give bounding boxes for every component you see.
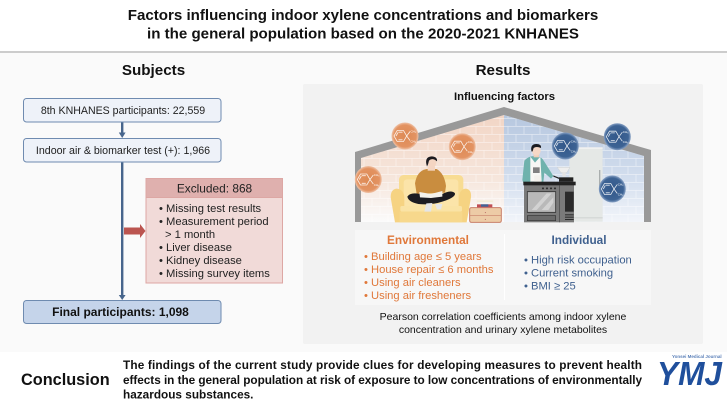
xylene molecules: environmental	[355, 122, 476, 193]
individual factors: • High risk occupation	[524, 254, 632, 266]
xylene molecules: environmental: CH₃	[374, 173, 380, 177]
heading: influencing factors: Influencing factors	[454, 91, 555, 103]
arrow: exclusion	[124, 224, 146, 238]
box: final participants	[24, 300, 221, 324]
logo: YMJ: Yonsei Medical Journal	[672, 354, 722, 359]
xylene molecules: environmental: CH₃	[468, 150, 474, 154]
heading: conclusion: Conclusion	[21, 371, 110, 389]
sofa	[391, 175, 471, 222]
box: KNHANES participants	[24, 98, 221, 122]
conclusion text: hazardous substances.	[123, 388, 253, 402]
arrow: participants to test	[119, 122, 126, 138]
individual factors: • BMI ≥ 25	[524, 280, 576, 292]
environmental factors: • Using air fresheners	[364, 290, 472, 302]
xylene molecules: individual: CH₃	[618, 182, 624, 186]
title	[128, 7, 598, 42]
exclusion list: • Liver disease	[159, 242, 232, 254]
xylene molecules: environmental: CH₃	[410, 140, 417, 144]
xylene molecules: individual	[552, 123, 631, 202]
correlation note: Pearson correlation coefficients among indoor xylene	[380, 311, 627, 323]
scene: living room	[391, 156, 501, 222]
xylene molecules: individual: CH₃	[623, 140, 629, 144]
title: Factors influencing indoor xylene concentrations and biomarkers	[128, 7, 598, 24]
xylene molecules: individual: CH₃	[618, 192, 624, 196]
illustration: house	[355, 107, 651, 222]
arrow: test to final participants	[119, 162, 126, 300]
xylene molecules: environmental: CH₃	[468, 140, 474, 144]
side table with books	[470, 200, 501, 222]
individual factors: Individual	[551, 233, 607, 247]
exclusion list	[159, 203, 270, 280]
correlation note: concentration and urinary xylene metabolites	[399, 324, 607, 336]
xylene molecules: individual: CH₃	[571, 150, 577, 154]
exclusion list: > 1 month	[165, 229, 215, 241]
stove	[523, 182, 576, 222]
xylene molecules: individual: CH₃	[623, 130, 629, 134]
box: final participants: Final participants: 1,098	[52, 305, 189, 319]
logo: YMJ: YMJ	[657, 355, 723, 392]
environmental factors: • Using air cleaners	[364, 277, 461, 289]
excluded header: Excluded: 868	[177, 182, 253, 196]
panel: results	[303, 84, 703, 344]
panel: subjects flowchart	[24, 62, 282, 324]
box: indoor air and biomarker test: Indoor air & biomarker test (+): 1,966	[36, 145, 210, 157]
environmental factors: Environmental	[387, 233, 469, 247]
panel: factors	[355, 230, 651, 305]
exclusion list: • Kidney disease	[159, 255, 242, 267]
refrigerator	[569, 147, 603, 222]
title: in the general population based on the 2020-2021 KNHANES	[147, 26, 579, 42]
conclusion text: effects in the general population at risk of exposure to low concentrations of environmentally	[123, 373, 642, 387]
conclusion text: The findings of the current study provide clues for developing measures to prevent health	[123, 358, 642, 372]
walls	[361, 115, 504, 222]
roof	[355, 107, 651, 222]
box: KNHANES participants: 8th KNHANES participants: 22,559	[41, 105, 205, 117]
xylene molecules: environmental: CH₃	[410, 130, 417, 134]
conclusion text	[123, 358, 642, 402]
environmental factors: • Building age ≤ 5 years	[364, 251, 482, 263]
environmental factors: • House repair ≤ 6 months	[364, 264, 494, 276]
individual factors	[524, 233, 632, 292]
individual factors: • Current smoking	[524, 268, 613, 280]
pan and bowl	[553, 167, 573, 182]
panel: excluded	[146, 178, 282, 283]
background band	[0, 53, 727, 352]
exclusion list: • Missing test results	[159, 203, 262, 215]
person reading	[407, 156, 455, 212]
heading: results: Results	[476, 62, 530, 79]
xylene molecules: individual: CH₃	[571, 140, 577, 144]
environmental factors	[364, 233, 494, 302]
xylene molecules: environmental: CH₃	[374, 183, 380, 187]
box: indoor air and biomarker test	[24, 138, 221, 162]
heading: subjects: Subjects	[122, 62, 185, 79]
exclusion list: • Missing survey items	[159, 268, 270, 280]
correlation note	[380, 311, 627, 336]
person cooking	[522, 144, 553, 183]
scene: kitchen	[522, 144, 603, 222]
exclusion list: • Measurement period	[159, 216, 269, 228]
